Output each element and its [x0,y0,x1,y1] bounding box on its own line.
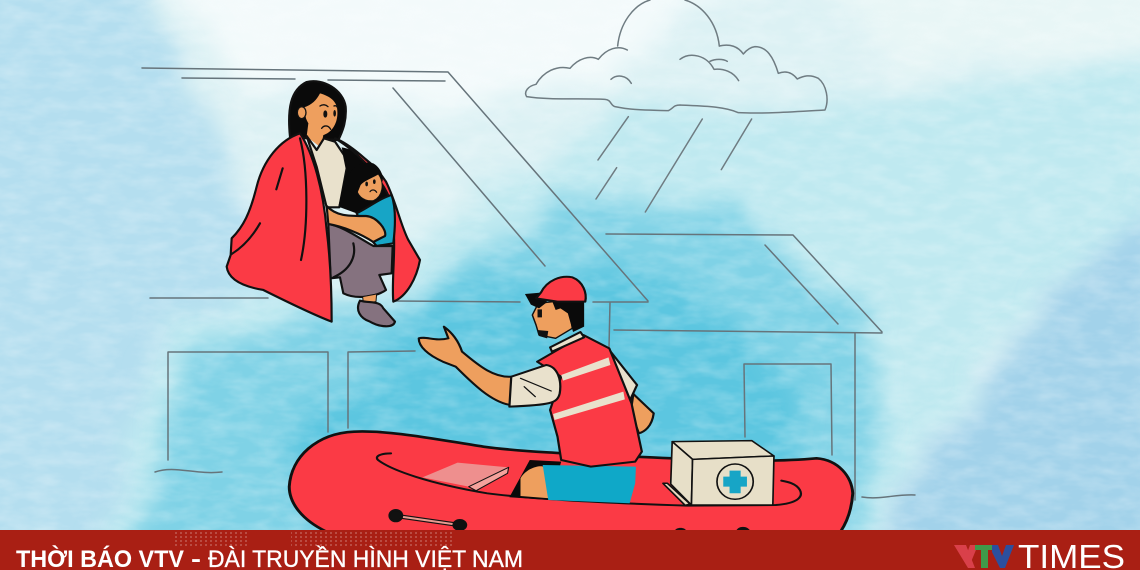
trousers [328,224,393,297]
banner title text [16,545,523,570]
sleeve creases [520,378,551,397]
child's hair [347,163,383,195]
face details [320,105,337,129]
ear [297,107,306,119]
line art: flooded houses [142,68,915,500]
vest reflective stripes [553,357,625,420]
shoe [358,301,395,326]
figure: rescue worker and inflatable boat [289,277,853,532]
face details [537,309,548,338]
child's face details [370,190,377,192]
dark shadow behind child [338,147,393,213]
boat hull [289,431,853,532]
shorts [543,465,636,503]
VTV TIMES logo [954,538,1125,570]
sleeve [509,365,560,407]
collar [550,332,584,352]
cap [536,277,586,302]
footer banner [0,530,1140,570]
child's shirt [357,195,395,246]
boat inner rim [377,453,801,506]
knee [520,466,549,498]
hair [289,81,346,140]
icon: rain cloud [526,0,827,212]
hair [525,293,584,332]
pink bench board [422,463,509,491]
mother's arm [327,206,385,242]
leg shadow [509,460,561,500]
back sleeve [609,350,637,403]
boat handle [390,510,466,530]
blanket folds [232,138,354,277]
boat bottom rivets [674,527,751,532]
back arm [631,394,654,433]
outstretched arm [419,327,512,405]
first aid box [663,441,774,505]
ankle [363,294,377,303]
neck [307,123,323,147]
vest [537,335,642,467]
blanket right side [335,138,420,302]
child's head [357,174,382,201]
face [532,300,572,338]
shirt [307,136,347,207]
blanket left side [227,133,332,322]
face [304,93,337,135]
figure: mother and child under a red blanket [227,81,420,326]
